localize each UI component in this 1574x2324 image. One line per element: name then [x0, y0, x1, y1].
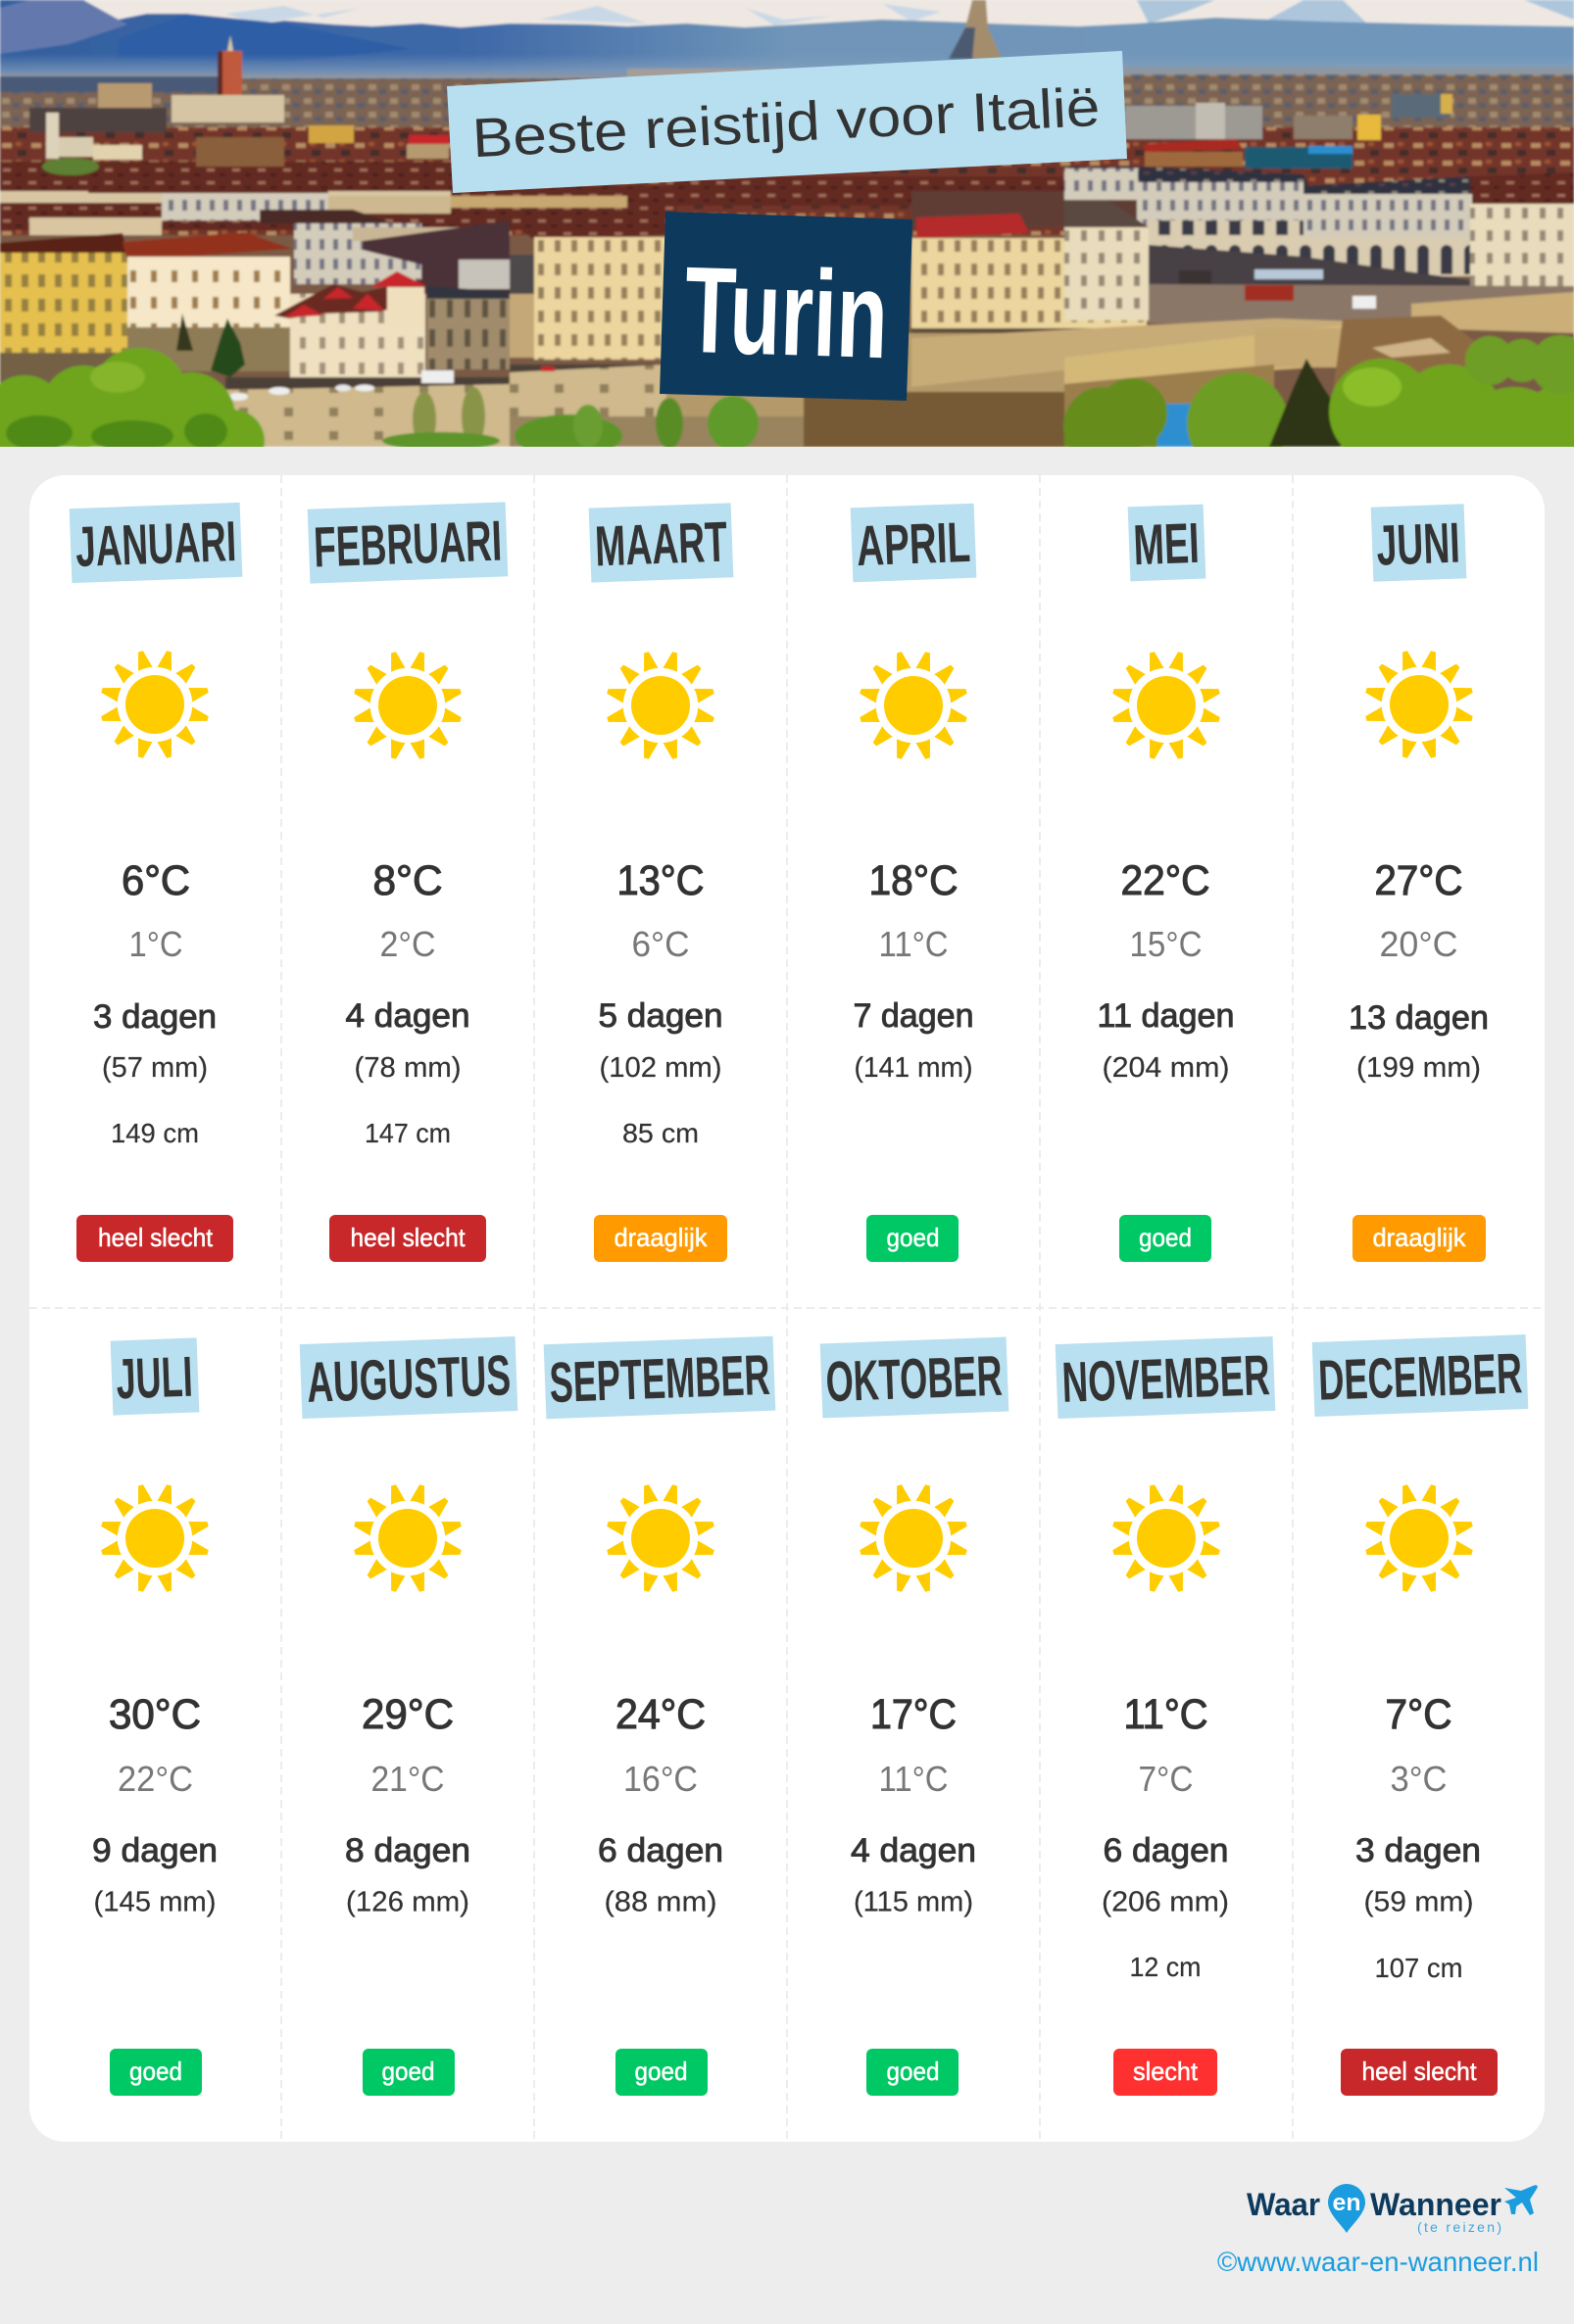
rating badge: goed — [635, 2057, 688, 2086]
banner: Beste reistijd voor Italië: Beste reistijd voor Italië — [470, 75, 1102, 169]
month label — [308, 502, 508, 584]
temperatures and rain: 17°C — [870, 1691, 957, 1738]
rating badge: draaglijk — [1372, 1223, 1466, 1252]
temperatures and rain: 6°C — [122, 857, 190, 904]
logo: Waar en Wanneer — [1247, 2184, 1538, 2235]
temperatures and rain: 3 dagen — [93, 998, 217, 1036]
website credit: ©www.waar-en-wanneer.nl — [1217, 2247, 1539, 2277]
month label — [111, 1337, 199, 1416]
temperatures and rain: 3 dagen — [1355, 1832, 1481, 1869]
temperatures and rain: 11°C — [1123, 1691, 1207, 1738]
trees center — [412, 392, 437, 435]
temperatures and rain: 4 dagen — [851, 1832, 976, 1869]
month: februari — [308, 502, 508, 1262]
rating badge: goed — [129, 2057, 182, 2086]
month: september — [544, 1336, 775, 2096]
temperatures and rain: 149 cm — [111, 1118, 199, 1148]
month label — [544, 1336, 775, 1419]
rating badge — [1341, 2049, 1498, 2096]
temperatures and rain: 29°C — [362, 1691, 454, 1738]
temperatures and rain: (126 mm) — [346, 1887, 469, 1918]
month: maart — [589, 503, 733, 1262]
temperatures and rain: (88 mm) — [604, 1887, 717, 1918]
icon: sun — [353, 1483, 463, 1593]
temperatures and rain — [93, 857, 217, 1148]
month: januari — [70, 503, 242, 1262]
icon: sun — [1111, 651, 1221, 760]
month label — [1371, 504, 1466, 582]
temperatures and rain: (115 mm) — [854, 1887, 973, 1918]
temperatures and rain: 20°C — [1380, 924, 1458, 964]
icon: sun — [1364, 650, 1474, 759]
piazza — [1147, 243, 1470, 286]
rating badge — [363, 2049, 455, 2096]
rating badge: goed — [1139, 1223, 1192, 1252]
icon: sun — [606, 1483, 715, 1593]
tan hall — [426, 286, 510, 300]
temperatures and rain: 6 dagen — [1104, 1832, 1229, 1869]
rating badge — [594, 1215, 727, 1262]
temperatures and rain: 21°C — [370, 1759, 445, 1799]
month label: NOVEMBER — [1060, 1343, 1271, 1415]
long piazza palazzo — [1064, 167, 1313, 196]
bare tree — [804, 392, 1064, 447]
month label: AUGUSTUS — [306, 1343, 512, 1415]
title box: Turin: Turin — [683, 242, 890, 384]
month label: OKTOBER — [824, 1344, 1004, 1414]
rating badge: draaglijk — [614, 1223, 708, 1252]
temperatures and rain — [1355, 1691, 1481, 1983]
rating badge: heel slecht — [98, 1223, 214, 1252]
lower left wall — [225, 377, 510, 389]
temperatures and rain: 30°C — [109, 1691, 201, 1738]
hero photo: Turin skyline with Alps — [0, 0, 1574, 495]
month: november — [1056, 1336, 1275, 2096]
temperatures and rain — [1102, 1691, 1229, 1982]
temperatures and rain: 12 cm — [1129, 1952, 1202, 1982]
logo: Waar en Wanneer: (te reizen) — [1417, 2219, 1501, 2235]
rating badge — [110, 2049, 202, 2096]
temperatures and rain: (141 mm) — [855, 1052, 972, 1084]
month label: JANUARI — [74, 509, 237, 579]
month label: MEI — [1132, 511, 1201, 577]
temperatures and rain: 7°C — [1386, 1691, 1452, 1738]
temperatures and rain: 15°C — [1129, 924, 1202, 964]
rating badge — [866, 2049, 959, 2096]
month label: MAART — [594, 510, 728, 578]
banner: Beste reistijd voor Italië — [447, 51, 1127, 193]
month label — [1056, 1336, 1275, 1419]
temperatures and rain: 22°C — [118, 1759, 193, 1799]
temperatures and rain: 13°C — [617, 857, 704, 904]
rating badge: heel slecht — [351, 1223, 466, 1252]
month label — [300, 1336, 517, 1419]
temperatures and rain: 7 dagen — [853, 997, 974, 1035]
month label — [851, 504, 976, 582]
temperatures and rain — [345, 1691, 470, 1918]
temperatures and rain: 16°C — [623, 1759, 698, 1799]
icon: sun — [100, 650, 210, 759]
temperatures and rain — [851, 1691, 976, 1918]
temperatures and rain: 11°C — [878, 924, 949, 964]
yellow building — [0, 231, 126, 254]
rating badge: slecht — [1133, 2057, 1199, 2086]
temperatures and rain: 147 cm — [365, 1118, 451, 1148]
icon: sun — [606, 651, 715, 760]
rating badge: heel slecht — [1362, 2057, 1477, 2086]
temperatures and rain: 7°C — [1139, 1759, 1194, 1799]
embankment walls — [666, 333, 1156, 451]
temperatures and rain: 24°C — [615, 1691, 706, 1738]
month label: JUNI — [1375, 511, 1461, 578]
temperatures and rain: (199 mm) — [1356, 1052, 1481, 1084]
temperatures and rain — [598, 857, 723, 1148]
rating badge — [1119, 1215, 1211, 1262]
title box: Turin — [660, 212, 912, 401]
red tower — [227, 35, 233, 51]
month: mei — [1098, 505, 1235, 1262]
temperatures and rain: (206 mm) — [1102, 1887, 1229, 1918]
logo: Waar en Wanneer: en — [1333, 2190, 1360, 2216]
month: april — [851, 504, 976, 1262]
temperatures and rain: (102 mm) — [600, 1052, 721, 1084]
temperatures and rain: 6°C — [631, 924, 690, 964]
temperatures and rain: 2°C — [380, 924, 435, 964]
temperatures and rain — [598, 1691, 723, 1918]
temperatures and rain — [1098, 857, 1235, 1084]
temperatures and rain: 11°C — [878, 1759, 949, 1799]
row of palazzi, left — [87, 188, 329, 194]
trees left — [0, 347, 266, 447]
icon: sun — [1111, 1483, 1221, 1593]
temperatures and rain: 107 cm — [1374, 1953, 1462, 1983]
rating badge: goed — [886, 1223, 939, 1252]
month: augustus — [300, 1336, 517, 2096]
icon: sun — [100, 1483, 210, 1593]
temperatures and rain: 8 dagen — [345, 1832, 470, 1869]
icon: map pin — [1328, 2184, 1365, 2233]
logo: Waar en Wanneer: Waar — [1247, 2187, 1320, 2222]
month label: SEPTEMBER — [548, 1343, 771, 1415]
temperatures and rain: 11 dagen — [1098, 997, 1235, 1035]
temperatures and rain: 22°C — [1121, 857, 1209, 904]
temperatures and rain: 1°C — [129, 924, 182, 964]
temperatures and rain — [853, 857, 974, 1084]
temperatures and rain: (145 mm) — [94, 1887, 216, 1918]
temperatures and rain: 5 dagen — [598, 997, 723, 1035]
month: juli — [92, 1337, 218, 2096]
temperatures and rain: (57 mm) — [102, 1052, 208, 1084]
far city — [0, 77, 1125, 129]
month label — [1128, 505, 1205, 581]
temperatures and rain: 27°C — [1374, 857, 1462, 904]
icon: sun — [859, 1483, 968, 1593]
rating badge — [329, 1215, 486, 1262]
month: december — [1312, 1334, 1528, 2096]
month: juni — [1349, 504, 1489, 1262]
month label — [70, 503, 242, 583]
apartments far right — [1125, 106, 1262, 139]
rating badge: goed — [382, 2057, 435, 2086]
temperatures and rain — [1349, 857, 1489, 1084]
temperatures and rain: 9 dagen — [92, 1832, 218, 1869]
Mole Antonelliana — [964, 0, 1002, 59]
temperatures and rain: (59 mm) — [1364, 1887, 1474, 1918]
month label — [820, 1337, 1008, 1418]
temperatures and rain: 3°C — [1390, 1759, 1447, 1799]
white building — [123, 232, 292, 261]
temperatures and rain: 13 dagen — [1349, 999, 1489, 1037]
temperatures and rain: (78 mm) — [355, 1052, 461, 1084]
month label: JULI — [115, 1345, 194, 1411]
icon: sun — [1364, 1483, 1474, 1593]
icon: sun — [353, 651, 463, 760]
temperatures and rain — [345, 857, 470, 1148]
rating badge — [615, 2049, 708, 2096]
temperatures and rain: 4 dagen — [345, 997, 470, 1035]
temperatures and rain: 8°C — [372, 857, 443, 904]
temperatures and rain: (204 mm) — [1102, 1052, 1229, 1084]
rating badge — [866, 1215, 959, 1262]
temperatures and rain — [92, 1691, 218, 1918]
temperatures and rain: 18°C — [868, 857, 959, 904]
rating badge: goed — [886, 2057, 939, 2086]
right of Turin sign — [666, 176, 1127, 206]
temperatures and rain: 6 dagen — [598, 1832, 723, 1869]
rating badge — [1113, 2049, 1217, 2096]
logo: Waar en Wanneer: Wanneer — [1370, 2187, 1501, 2222]
central palazzo — [524, 224, 664, 239]
mid city rooftops — [0, 127, 1574, 235]
month label — [589, 503, 733, 583]
building left of piazza — [1064, 200, 1149, 227]
temperatures and rain: 85 cm — [622, 1118, 699, 1148]
cars — [228, 393, 248, 401]
icon: sun — [859, 651, 968, 760]
month label: FEBRUARI — [313, 509, 503, 579]
panel: months card — [29, 475, 1545, 2142]
icon: airplane — [1504, 2185, 1538, 2215]
trees right — [1155, 402, 1194, 447]
month: oktober — [820, 1337, 1008, 2096]
rating badge — [76, 1215, 233, 1262]
rating badge — [1353, 1215, 1486, 1262]
villa — [290, 294, 425, 384]
month label: APRIL — [856, 510, 971, 578]
